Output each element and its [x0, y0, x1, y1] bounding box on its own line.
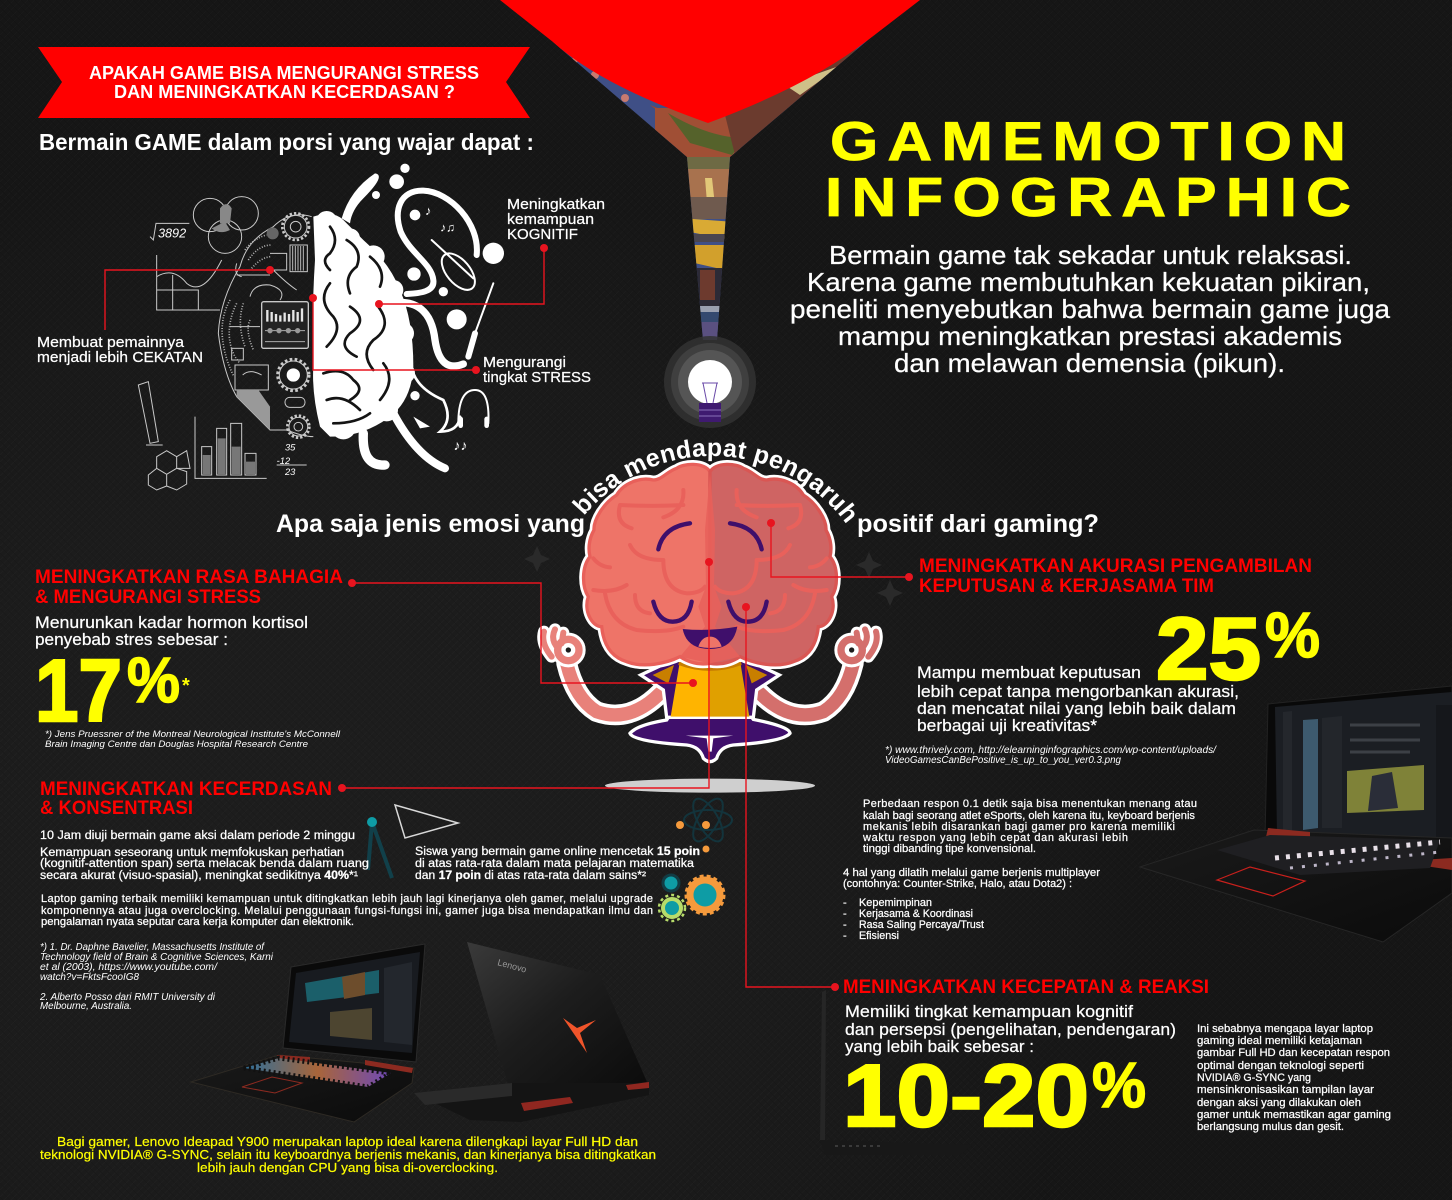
heading: KEPUTUSAN & KERJASAMA TIM [919, 575, 1214, 597]
text: perbedaan respon: mekanis lebih disarankan bagi gamer pro karena memiliki [863, 821, 1175, 833]
image: front laptop [191, 944, 425, 1122]
main title: INFOGRAPHIC [825, 166, 1360, 228]
text: kemampuan: Kemampuan seseorang untuk memfokuskan perhatian [40, 847, 344, 859]
description: dan mencatat nilai yang lebih baik dalam [917, 699, 1236, 718]
shadow [605, 779, 815, 793]
footnotes: *) 1. Dr. Daphne Bavelier, Massachusetts Institute of [40, 942, 265, 953]
right brain art: ♪♪ [453, 437, 467, 453]
math doodles: 35 [285, 443, 296, 453]
icons: geometry and science [367, 794, 732, 921]
question heading: positif dari gaming? [857, 510, 1099, 538]
side paragraph: dengan aksi yang dilakukan oleh [1197, 1097, 1361, 1109]
side paragraph: optimal dengan teknologi seperti [1197, 1060, 1364, 1072]
brain label: cekatan: menjadi lebih CEKATAN [37, 349, 203, 366]
brain head [584, 464, 836, 665]
list: skills: - [843, 919, 847, 931]
main title: GAMEMOTION [830, 110, 1355, 172]
right brain art [313, 164, 504, 468]
stat 17%: % [127, 644, 180, 716]
stat 10-20%: 10-20 [843, 1046, 1089, 1145]
title banner [38, 47, 530, 118]
right brain art: ♪ [425, 204, 431, 218]
footnotes: Technology field of Brain & Cognitive Sciences, Karni [40, 952, 274, 963]
panel: kecepatan [843, 976, 1391, 1145]
list: skills: Rasa Saling Percaya/Trust [859, 919, 984, 931]
stat 10-20%: % [1092, 1049, 1146, 1121]
text: multiplayer: 4 hal yang dilatih melalui game berjenis multiplayer [843, 867, 1100, 879]
text: perbedaan respon: tinggi dibanding tipe konvensional. [863, 843, 1036, 855]
math doodles [138, 197, 307, 490]
side paragraph: NVIDIA® G-SYNC yang [1197, 1072, 1311, 1084]
footnotes: watch?v=FktsFcooIG8 [40, 972, 139, 983]
footnotes [39, 942, 274, 1012]
footnote [885, 745, 1217, 766]
intro paragraph: mampu meningkatkan prestasi akademis [838, 321, 1342, 351]
footnote: Brain Imaging Centre dan Douglas Hospital Research Centre [45, 739, 308, 750]
math doodles: -12 [277, 456, 291, 466]
bottom caption: lebih jauh dengan CPU yang bisa di-overclocking. [197, 1160, 498, 1175]
description [917, 663, 1239, 735]
intro paragraph: peneliti menyebutkan bahwa bermain game juga [790, 294, 1391, 324]
list: skills: - [843, 930, 847, 942]
footnote [45, 729, 341, 750]
stat 17%: 17 [35, 641, 122, 740]
text: kemampuan: secara akurat (visuo-spasial), meningkat sedikitnya 40%*¹ [40, 870, 358, 882]
footnotes: Melbourne, Australia. [40, 1001, 132, 1012]
footnotes: et al (2003), https://www.youtube.com/ [40, 962, 218, 973]
bottom caption [40, 1134, 656, 1175]
image: side laptop [820, 990, 972, 1155]
description: lebih cepat tanpa mengorbankan akurasi, [917, 682, 1239, 701]
stat 25%: 25 [1156, 599, 1261, 698]
brain label: stress: Mengurangi [483, 354, 566, 371]
brain label: kognitif [507, 196, 605, 243]
connector lines to character [338, 519, 913, 991]
text: siswa [415, 846, 700, 882]
stat 17% [35, 641, 190, 740]
text: kemampuan: (kognitif-attention span) serta melacak benda dalam ruang [40, 858, 369, 870]
stat 25% [1156, 599, 1320, 698]
brain character [543, 464, 877, 793]
list: skills: - [843, 908, 847, 920]
brain label: kognitif: KOGNITIF [507, 226, 578, 243]
heading [35, 566, 343, 608]
text: perbedaan respon [862, 798, 1197, 855]
footnote: *) Jens Pruessner of the Montreal Neurological Institute's McConnell [45, 729, 341, 740]
panel: kecerdasan [39, 778, 732, 1012]
side paragraph [1197, 1023, 1391, 1133]
intro paragraph: dan melawan demensia (pikun). [894, 348, 1285, 378]
decorative stars [524, 546, 903, 606]
brain label: kognitif: Meningkatkan [507, 196, 605, 213]
text: multiplayer: (contohnya: Counter-Strike, Halo, atau Dota2) : [843, 878, 1072, 890]
heading [919, 555, 1312, 597]
side paragraph: gambar Full HD dan kecepatan respon [1197, 1047, 1390, 1059]
brain label: cekatan: Membuat pemainnya [37, 334, 185, 351]
side paragraph: berlangsung mulus dan gesit. [1197, 1121, 1344, 1133]
description: Menurunkan kadar hormon kortisol [35, 613, 308, 632]
brain label: cekatan [37, 334, 203, 366]
heading: MENINGKATKAN KECEPATAN & REAKSI [843, 976, 1209, 998]
question heading: bisa mendapat pengaruh [572, 439, 854, 524]
game art zipper opening [553, 40, 868, 340]
brain label: stress [483, 354, 591, 386]
stat 25%: % [1265, 599, 1320, 671]
text: 10 jam: 10 Jam diuji bermain game aksi dalam periode 2 minggu [40, 830, 355, 842]
text: siswa: dan 17 poin di atas rata-rata dalam sains*² [415, 870, 646, 882]
description: Memiliki tingkat kemampuan kognitif [845, 1002, 1133, 1021]
text: perbedaan respon: kalah bagi seorang atlet eSports, oleh karena itu, keyboard berjenis [863, 810, 1195, 822]
text: laptop gaming: komponennya atau juga overclocking. Melalui penggunaan fungsi-fungsi ini, gamer juga bisa mendapatkan ilmu dan [41, 905, 653, 917]
footnotes: 2. Alberto Posso dari RMIT University di [39, 992, 216, 1003]
illustration: split brain [138, 164, 504, 490]
text: perbedaan respon: waktu respon yang lebih cepat dan akurasi lebih [862, 832, 1128, 844]
hands [543, 629, 877, 661]
text: siswa: Siswa yang bermain game online mencetak 15 poin [415, 846, 700, 858]
face [653, 523, 767, 622]
arms [567, 663, 853, 715]
title banner: DAN MENINGKATKAN KECERDASAN ? [114, 82, 455, 102]
text: laptop gaming: Laptop gaming terbaik memiliki kemampuan untuk ditingkatkan lebih jauh lagi kinerjanya oleh gamer, melalui upgrade [41, 893, 653, 905]
intro paragraph: Bermain game tak sekadar untuk relaksasi. [829, 240, 1352, 270]
footnote: *) www.thrively.com, http://elearninginfographics.com/wp-content/uploads/ [885, 745, 1217, 756]
side paragraph: mensinkronisasikan tampilan layar [1197, 1084, 1374, 1096]
heading: MENINGKATKAN KECERDASAN [40, 778, 332, 800]
list: skills [843, 897, 984, 942]
right brain art: ♪♫ [440, 221, 455, 235]
side paragraph: gamer untuk memastikan agar gaming [1197, 1109, 1391, 1121]
side paragraph: gaming ideal memiliki ketajaman [1197, 1035, 1362, 1047]
list: skills: - [843, 897, 847, 909]
icon: light bulb [664, 336, 756, 428]
image: back laptop [414, 942, 649, 1122]
heading [40, 778, 332, 819]
brain connector lines [105, 244, 548, 374]
bottom caption: Bagi gamer, Lenovo Ideapad Y900 merupakan laptop ideal karena dilengkapi layar Full HD dan [57, 1134, 638, 1149]
description: penyebab stres sebesar : [35, 630, 228, 649]
torso [641, 657, 779, 717]
panel: rasa bahagia [35, 566, 343, 750]
text: kemampuan [40, 847, 369, 882]
list: skills: Kepemimpinan [859, 897, 932, 909]
intro paragraph: Karena game membutuhkan kekuatan pikiran, [807, 267, 1370, 297]
description: yang lebih baik sebesar : [845, 1037, 1034, 1056]
description [35, 613, 308, 649]
main title [825, 110, 1360, 228]
math doodles: 3892 [158, 226, 186, 240]
list: skills: Efisiensi [859, 930, 899, 942]
brain label: kognitif: kemampuan [507, 211, 594, 228]
text: laptop gaming [41, 893, 653, 928]
stat 17%: * [182, 675, 190, 697]
heading: MENINGKATKAN RASA BAHAGIA [35, 566, 343, 588]
question heading [276, 439, 1099, 538]
text: siswa: di atas rata-rata dalam mata pelajaran matematika [415, 858, 695, 870]
list: skills: Kerjasama & Koordinasi [859, 908, 973, 920]
heading: MENINGKATKAN AKURASI PENGAMBILAN [919, 555, 1312, 577]
left brain technical doodles [218, 213, 313, 438]
heading: & MENGURANGI STRESS [35, 586, 261, 608]
heading: & KONSENTRASI [40, 797, 193, 819]
question heading: Apa saja jenis emosi yang [276, 510, 585, 538]
description: Mampu membuat keputusan [917, 663, 1141, 682]
brain label: stress: tingkat STRESS [483, 369, 591, 386]
math doodles: 23 [284, 467, 296, 477]
intro paragraph [790, 240, 1391, 378]
text: perbedaan respon: Perbedaan respon 0.1 detik saja bisa menentukan menang atau [863, 798, 1197, 810]
description [845, 1002, 1176, 1056]
description: dan persepsi (pengelihatan, pendengaran) [845, 1020, 1176, 1039]
red top shape [500, 0, 920, 123]
description: berbagai uji kreativitas* [917, 716, 1097, 735]
text: laptop gaming: pengalaman nyata seputar cara kerja komputer dan elektronik. [41, 916, 354, 928]
text: multiplayer [843, 867, 1100, 890]
subheading: Bermain GAME dalam porsi yang wajar dapat : [39, 129, 534, 155]
title banner: APAKAH GAME BISA MENGURANGI STRESS [89, 63, 479, 83]
image: back laptop: Lenovo [496, 957, 528, 975]
footnote: VideoGamesCanBePositive_is_up_to_you_ver0.3.png [885, 755, 1121, 766]
panel: akurasi [885, 555, 1452, 942]
image: right laptop [1140, 686, 1452, 942]
legs [630, 715, 790, 762]
bottom caption: teknologi NVIDIA® G-SYNC, selain itu keyboardnya berjenis mekanis, dan kinerjanya bisa ditingkatkan [40, 1147, 656, 1162]
side paragraph: Ini sebabnya mengapa layar laptop [1197, 1023, 1373, 1035]
